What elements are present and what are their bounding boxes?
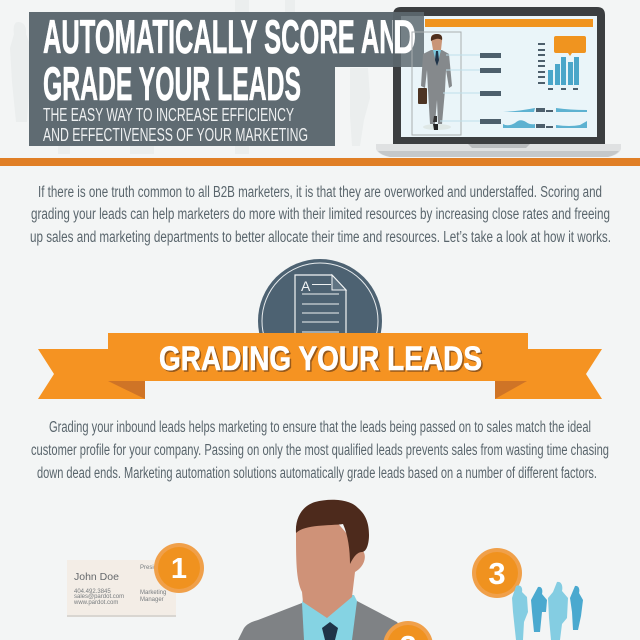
badge 3: 3 — [488, 556, 506, 591]
callout — [554, 36, 586, 56]
man on screen — [418, 34, 452, 130]
banner heading: GRADING YOUR LEADS — [159, 340, 482, 378]
orange ribbon banner — [38, 333, 602, 399]
business card: John Doe — [74, 571, 119, 583]
orange divider bar — [0, 158, 640, 166]
business card: sales@pardot.com — [74, 594, 124, 600]
bar chart — [538, 36, 586, 90]
team silhouettes — [512, 582, 583, 640]
neck and face — [296, 520, 365, 618]
hair — [296, 500, 369, 564]
shirt — [302, 595, 357, 640]
label bars — [480, 53, 501, 124]
subtitle line 2: AND EFFECTIVENESS OF YOUR MARKETING — [43, 125, 308, 145]
header title panel — [29, 10, 424, 146]
banner heading: GRADING YOUR LEADS — [160, 342, 484, 380]
connector lines — [440, 55, 480, 121]
area charts — [503, 108, 587, 128]
business card — [67, 560, 176, 617]
grading paragraph — [31, 419, 609, 482]
laptop illustration — [376, 7, 621, 157]
subtitle line 1: THE EASY WAY TO INCREASE EFFICIENCY — [43, 105, 294, 125]
man portrait — [238, 500, 410, 640]
business card: Manager — [140, 597, 164, 603]
tie — [322, 622, 338, 640]
business card: Marketing — [140, 590, 166, 596]
business card: www.pardot.com — [73, 600, 118, 606]
badge 2 — [383, 621, 433, 640]
jacket — [238, 601, 410, 640]
background silhouettes — [10, 0, 370, 154]
badge 1: 1 — [171, 553, 187, 585]
business card: President — [140, 565, 166, 571]
business card: 404.492.3845 — [74, 589, 111, 595]
title line 2: GRADE YOUR LEADS — [43, 57, 301, 110]
icon: graded document in circle — [258, 259, 382, 333]
title panel overlap on laptop — [393, 12, 424, 67]
badge 1 — [154, 543, 204, 593]
overlap title letters: D — [393, 10, 416, 63]
icon: graded document in circle: A — [301, 278, 311, 294]
badge 3 — [472, 548, 522, 598]
intro paragraph — [30, 184, 611, 246]
